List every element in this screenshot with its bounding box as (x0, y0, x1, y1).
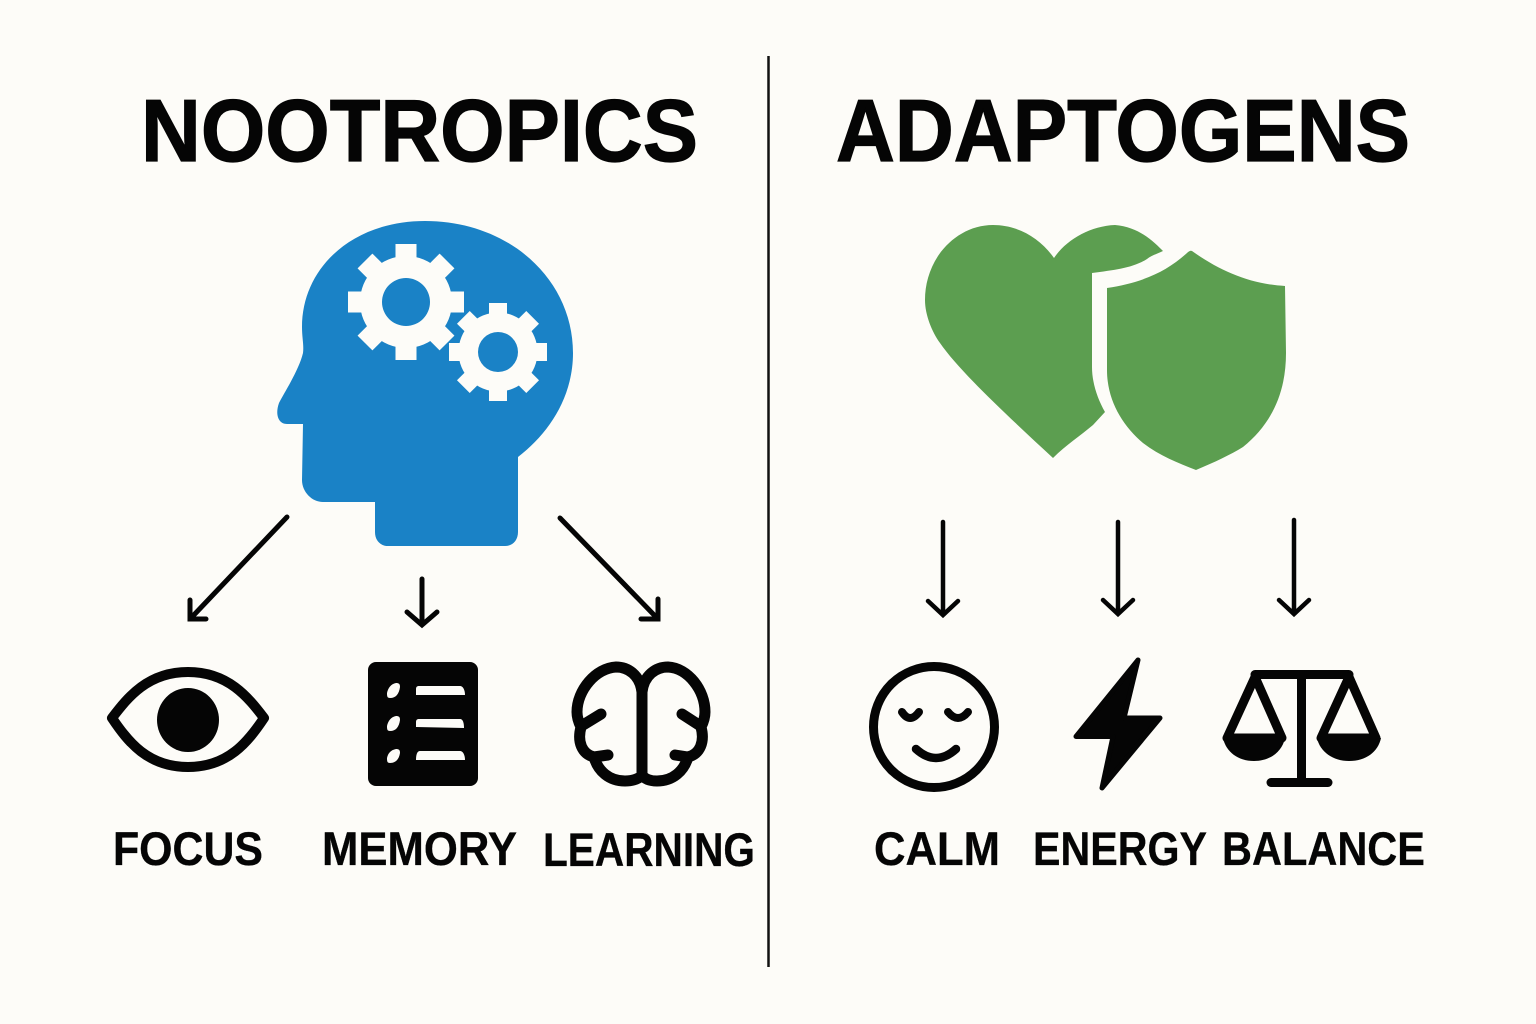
label: balance: BALANCE (1222, 822, 1425, 875)
icon: calm face (874, 666, 994, 788)
icon: brain outline (577, 667, 705, 781)
icon: blue head with gears (277, 221, 573, 546)
label: learning: LEARNING (543, 823, 755, 876)
label: energy: ENERGY (1033, 822, 1207, 875)
arrow: to calm (928, 522, 958, 615)
icon: shield (1107, 251, 1286, 470)
arrow: to memory (407, 579, 437, 625)
label: calm: CALM (874, 822, 1000, 875)
icon: eye (112, 672, 264, 767)
title: nootropics: NOOTROPICS (141, 81, 698, 180)
label: memory: MEMORY (322, 822, 517, 875)
icon: heart (925, 225, 1163, 458)
title: adaptogens: ADAPTOGENS (836, 81, 1410, 180)
icon: balance scale (1223, 674, 1381, 782)
icon: small gear (449, 303, 547, 401)
panel: adaptogens (836, 81, 1425, 875)
arrow: to energy (1103, 522, 1133, 614)
icon: lightning bolt (1076, 660, 1160, 788)
arrow: to focus (190, 517, 287, 619)
panel: nootropics (112, 81, 755, 876)
arrow: to learning (560, 518, 658, 619)
label: focus: FOCUS (113, 822, 263, 875)
icon: green heart and shield (925, 225, 1286, 470)
icon: large gear (348, 244, 464, 360)
arrow: to balance (1279, 520, 1309, 614)
icon: memory checklist (368, 662, 478, 786)
